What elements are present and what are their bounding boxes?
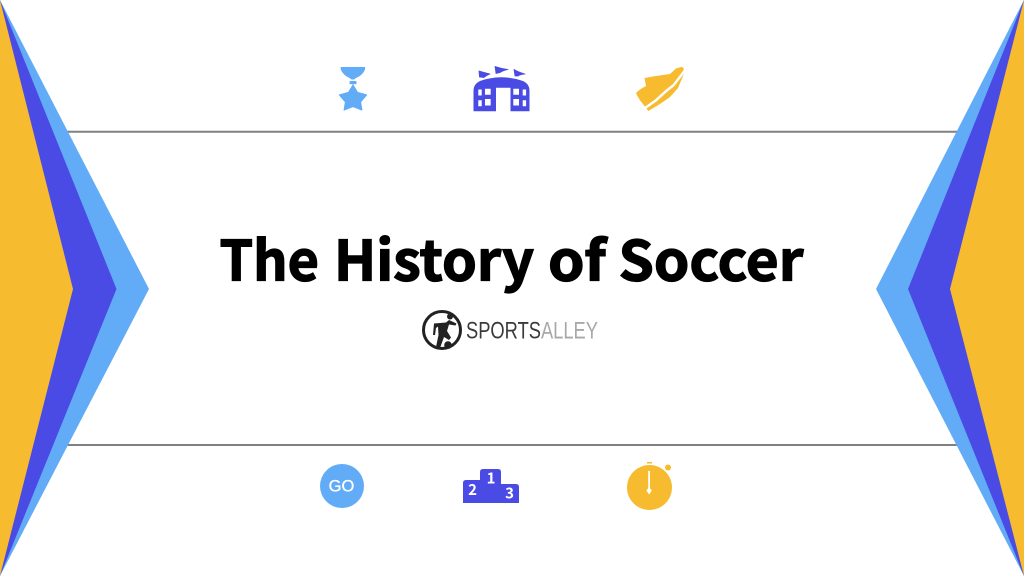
icon: stopwatch [627,462,672,510]
icon: medal [340,67,366,110]
right chevron stack [876,0,1024,576]
icon: stadium [474,66,530,111]
title: The [220,216,319,296]
icon: GO badge [320,464,364,508]
icon: podium: 3 [505,482,514,504]
title: of [548,216,609,296]
icon: podium: 1 [487,468,495,488]
logo: Sports Alley [424,312,598,349]
icon: podium: 2 [468,479,477,500]
icon: running shoe [636,67,684,111]
left chevron stack [0,0,149,576]
title [220,216,805,296]
top divider line [60,131,964,133]
title: History [334,216,534,296]
icon: GO badge: GO [329,478,354,496]
bottom divider line [60,444,964,446]
logo emblem: player in circle [424,312,460,349]
icon: podium [463,468,519,504]
title: Soccer [618,216,805,296]
logo wordmark: SPORTSALLEY [466,317,598,344]
